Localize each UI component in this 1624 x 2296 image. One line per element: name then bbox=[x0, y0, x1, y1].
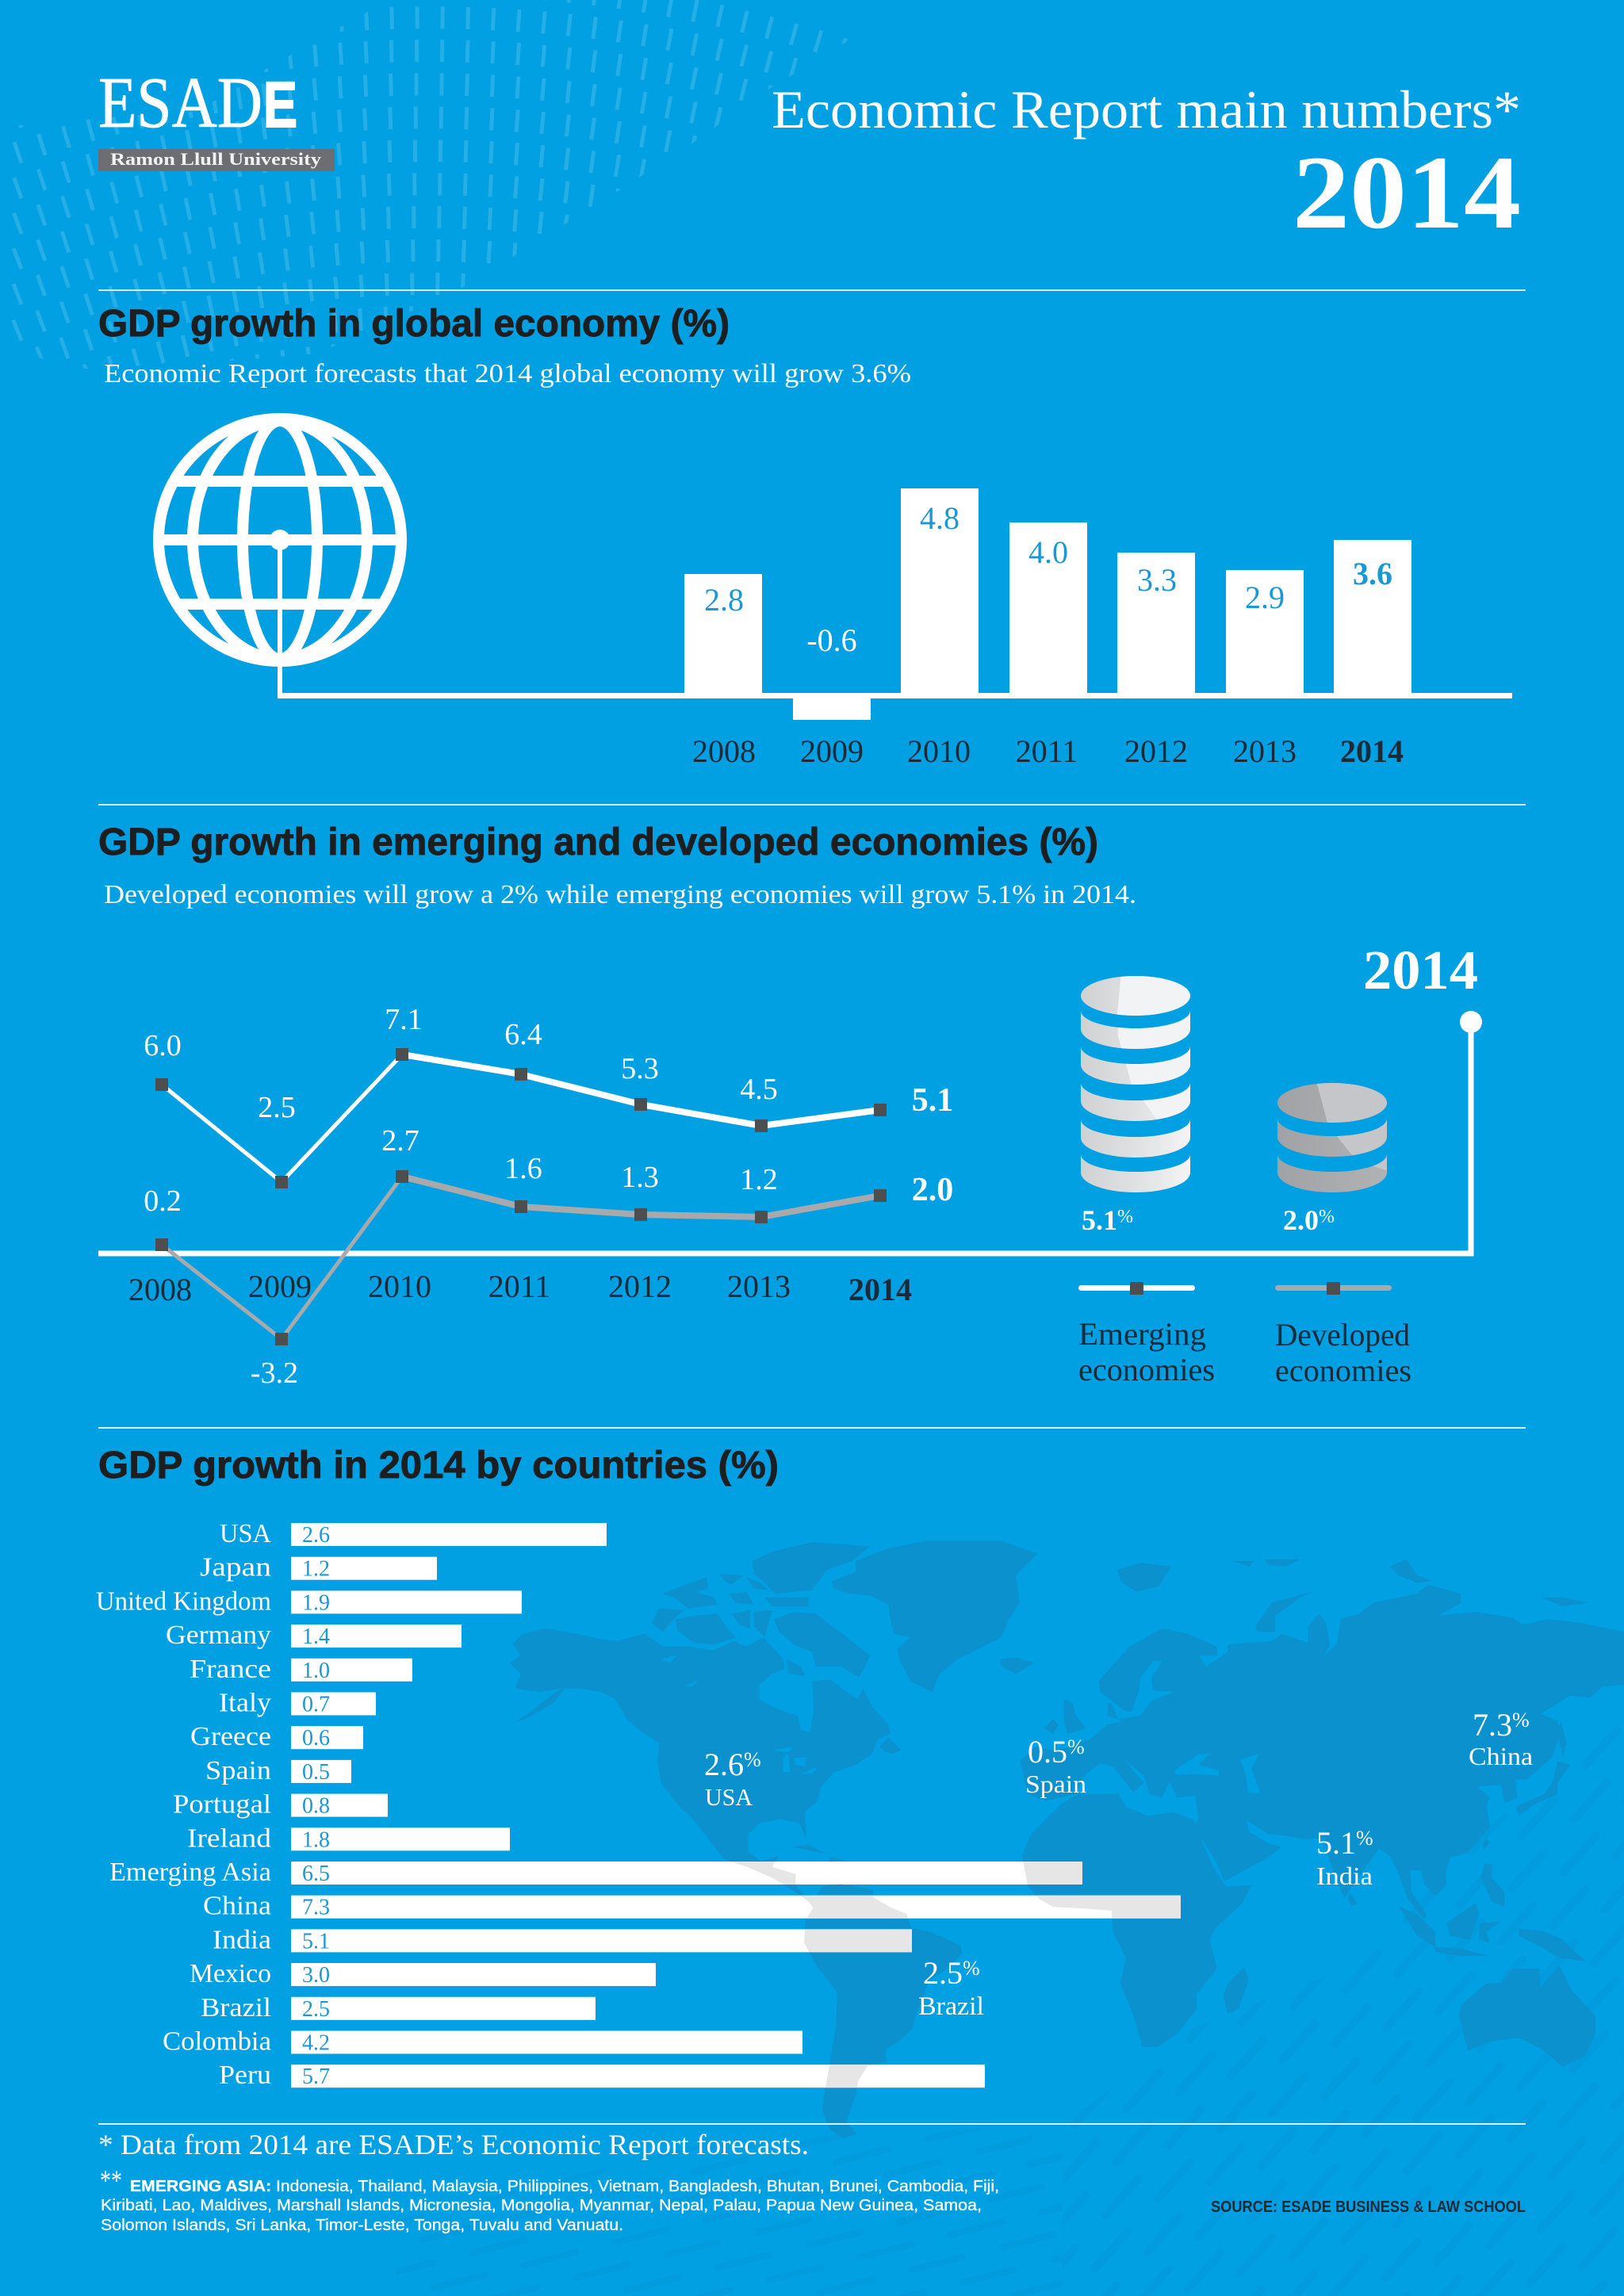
bar 2014: 3.6 bbox=[1353, 556, 1392, 591]
row USA: 2.6 bbox=[302, 1523, 330, 1548]
row Brazil: Brazil bbox=[201, 1993, 271, 2022]
map callout India: % bbox=[1356, 1827, 1373, 1850]
bar 2013: 2.9 bbox=[1245, 580, 1285, 615]
developed value labels: -3.2 bbox=[251, 1357, 298, 1390]
decorative fan of light dashes, top left bbox=[11, 0, 848, 369]
bar 2009: -0.6 bbox=[806, 622, 857, 658]
row Germany: Germany bbox=[166, 1621, 271, 1650]
2014 label: 2014 bbox=[1363, 940, 1478, 1001]
world map bbox=[510, 1541, 1624, 2138]
row Peru: 5.7 bbox=[302, 2064, 330, 2089]
row Emerging Asia: Emerging Asia bbox=[109, 1858, 271, 1887]
row Colombia bbox=[163, 2026, 802, 2057]
map callout Spain: 0.5 bbox=[1028, 1734, 1067, 1770]
emerging asia note: ** bbox=[100, 2164, 122, 2196]
row France: 1.0 bbox=[302, 1659, 330, 1683]
developed stack value: % bbox=[1319, 1207, 1335, 1227]
map callout India: India bbox=[1316, 1862, 1373, 1890]
bar 2013 bbox=[1226, 570, 1304, 769]
map callout China: 7.3 bbox=[1473, 1707, 1512, 1743]
row Japan: Japan bbox=[200, 1553, 271, 1582]
emerging economies series bbox=[155, 1048, 887, 1188]
year axis labels: 2008 bbox=[128, 1272, 192, 1307]
bar 2008: 2.8 bbox=[704, 582, 744, 618]
forecast note: * Data from 2014 are ESADE’s Economic Report forecasts. bbox=[98, 2129, 809, 2160]
map callout Spain: Spain bbox=[1025, 1770, 1086, 1798]
chart baseline bbox=[278, 693, 1512, 698]
row Emerging Asia bbox=[109, 1858, 1082, 1887]
map callout Brazil: 2.5 bbox=[923, 1955, 963, 1991]
emerging value labels: 7.1 bbox=[385, 1003, 423, 1036]
icon: globe bbox=[159, 419, 401, 698]
legend: emerging economies bbox=[1078, 1282, 1215, 1387]
row Ireland: 1.8 bbox=[302, 1827, 330, 1852]
title year: 2014 bbox=[1293, 134, 1521, 251]
emerging value labels bbox=[144, 1003, 953, 1124]
row India: India bbox=[213, 1925, 271, 1954]
bar 2010: 2010 bbox=[907, 733, 971, 769]
university badge bbox=[98, 149, 335, 171]
row Ireland: Ireland bbox=[187, 1823, 271, 1853]
footnotes bbox=[98, 2129, 1526, 2234]
heading: GDP growth in 2014 by countries (%) bbox=[98, 1445, 779, 1487]
intro text: Developed economies will grow a 2% while emerging economies will grow 5.1% in 2014. bbox=[104, 880, 1136, 909]
bar 2011: 4.0 bbox=[1028, 534, 1068, 570]
ESADE logo bbox=[98, 63, 335, 171]
year axis labels: 2010 bbox=[368, 1269, 431, 1304]
developed stack value: 2.0 bbox=[1283, 1204, 1319, 1236]
developed value labels: 1.2 bbox=[740, 1163, 778, 1196]
row Mexico: 3.0 bbox=[302, 1963, 330, 1988]
row Greece: Greece bbox=[190, 1722, 271, 1751]
heading: GDP growth in global economy (%) bbox=[98, 303, 730, 345]
row Mexico: Mexico bbox=[190, 1959, 271, 1988]
heading: GDP growth in emerging and developed economies (%) bbox=[98, 821, 1098, 863]
title bbox=[772, 79, 1521, 251]
legend: developed economies: Developed bbox=[1275, 1317, 1410, 1353]
row Colombia: Colombia bbox=[163, 2026, 271, 2057]
emerging asia note: Solomon Islands, Sri Lanka, Timor-Leste, Tonga, Tuvalu and Vanuatu. bbox=[101, 2217, 623, 2234]
panel: GDP growth in emerging and developed economies bbox=[98, 821, 1482, 1390]
bar 2014: 2014 bbox=[1340, 733, 1404, 769]
line chart bbox=[98, 1003, 1482, 1390]
map callout USA: % bbox=[744, 1748, 761, 1771]
row Spain bbox=[205, 1756, 351, 1785]
map callout USA: 2.6 bbox=[704, 1747, 744, 1782]
year axis labels: 2011 bbox=[488, 1269, 550, 1304]
bar 2010 bbox=[901, 488, 979, 769]
developed economies series bbox=[155, 1170, 887, 1345]
emerging value labels: 5.3 bbox=[621, 1052, 659, 1085]
row Japan: 1.2 bbox=[302, 1557, 330, 1582]
row Peru: Peru bbox=[219, 2061, 271, 2090]
bar 2012: 3.3 bbox=[1137, 562, 1177, 598]
emerging value labels: 6.4 bbox=[504, 1018, 542, 1051]
source: SOURCE: ESADE BUSINESS & LAW SCHOOL bbox=[1211, 2198, 1526, 2216]
intro text: Economic Report forecasts that 2014 global economy will grow 3.6% bbox=[104, 359, 911, 388]
year axis labels: 2009 bbox=[248, 1269, 312, 1304]
panel: GDP growth in 2014 by countries bbox=[96, 1445, 1624, 2138]
row Portugal: Portugal bbox=[173, 1790, 271, 1820]
emerging asia note: Kiribati, Lao, Maldives, Marshall Islands, Micronesia, Mongolia, Myanmar, Nepal, Palau, Papua New Guinea, Samoa, bbox=[101, 2197, 982, 2214]
emerging asia note bbox=[100, 2164, 999, 2234]
year axis labels: 2014 bbox=[848, 1272, 912, 1307]
logo wordmark: ESAD bbox=[98, 63, 262, 143]
emerging value labels: 2.5 bbox=[258, 1091, 296, 1124]
developed value labels: 2.0 bbox=[912, 1172, 953, 1208]
bar 2013: 2013 bbox=[1233, 733, 1297, 769]
row China bbox=[203, 1892, 1181, 1921]
developed value labels: 1.3 bbox=[621, 1161, 659, 1194]
row United Kingdom bbox=[96, 1586, 522, 1616]
map callout Spain bbox=[1025, 1734, 1086, 1798]
map callout Brazil bbox=[918, 1955, 984, 2021]
bar chart bbox=[278, 488, 1512, 769]
map callout USA: USA bbox=[705, 1783, 753, 1811]
row Spain: 0.5 bbox=[302, 1760, 330, 1785]
decorative dark dashes, bottom bbox=[396, 1705, 1624, 2296]
map callout India: 5.1 bbox=[1316, 1825, 1356, 1861]
axis with end marker bbox=[98, 1011, 1482, 1253]
row Ireland bbox=[187, 1823, 510, 1853]
legend: emerging economies: economies bbox=[1078, 1352, 1215, 1387]
emerging value labels: 5.1 bbox=[912, 1082, 953, 1119]
row Brazil: 2.5 bbox=[302, 1997, 330, 2022]
legend: developed economies bbox=[1275, 1282, 1411, 1388]
map callout Brazil: % bbox=[963, 1957, 980, 1980]
row Portugal bbox=[173, 1790, 388, 1820]
row Greece: 0.6 bbox=[302, 1726, 330, 1751]
row China: China bbox=[203, 1892, 271, 1921]
row Japan bbox=[200, 1553, 437, 1582]
row Italy bbox=[219, 1689, 376, 1717]
developed value labels: 0.2 bbox=[144, 1184, 182, 1218]
row Italy: Italy bbox=[219, 1689, 271, 1717]
legend: emerging economies: Emerging bbox=[1078, 1316, 1206, 1352]
map callout China: % bbox=[1512, 1709, 1530, 1732]
bar 2012 bbox=[1117, 553, 1195, 769]
row Brazil bbox=[201, 1993, 596, 2022]
title line: Economic Report main numbers* bbox=[772, 79, 1521, 140]
row Emerging Asia: 6.5 bbox=[302, 1862, 330, 1886]
row France bbox=[190, 1655, 412, 1684]
emerging value labels: 4.5 bbox=[740, 1073, 778, 1106]
horizontal bars bbox=[96, 1519, 1181, 2090]
row China: 7.3 bbox=[302, 1896, 330, 1920]
year axis labels: 2012 bbox=[608, 1269, 672, 1304]
developed value labels bbox=[144, 1124, 953, 1390]
inland seas and lakes on the map bbox=[661, 1655, 1261, 1794]
row Germany: 1.4 bbox=[302, 1624, 330, 1649]
row Spain: Spain bbox=[205, 1756, 271, 1785]
developed value labels: 1.6 bbox=[504, 1152, 542, 1185]
map callout China bbox=[1469, 1707, 1533, 1770]
row United Kingdom: 1.9 bbox=[302, 1590, 330, 1615]
bar 2009 bbox=[793, 622, 871, 769]
emerging asia note: EMERGING ASIA: Indonesia, Thailand, Malaysia, Philippines, Vietnam, Bangladesh, Bhutan, Brunei, Cambodia, Fiji, bbox=[130, 2178, 999, 2195]
map callout USA bbox=[704, 1747, 761, 1811]
logo wordmark: E bbox=[263, 69, 297, 141]
bar 2008 bbox=[684, 574, 762, 769]
row Peru bbox=[219, 2061, 985, 2090]
row USA: USA bbox=[220, 1519, 271, 1548]
row Germany bbox=[166, 1621, 462, 1650]
map callout Brazil: Brazil bbox=[918, 1992, 984, 2021]
icon: developed coin stack bbox=[1277, 1083, 1387, 1192]
emerging stack value: 5.1 bbox=[1082, 1204, 1117, 1236]
row India: 5.1 bbox=[302, 1929, 330, 1954]
map callout China: China bbox=[1469, 1742, 1533, 1770]
map callout Spain: % bbox=[1067, 1735, 1085, 1758]
row France: France bbox=[190, 1655, 271, 1684]
row Portugal: 0.8 bbox=[302, 1794, 330, 1819]
bar 2014 bbox=[1334, 540, 1411, 769]
row USA bbox=[220, 1519, 607, 1548]
row Greece bbox=[190, 1722, 363, 1751]
emerging value labels: 6.0 bbox=[144, 1029, 182, 1062]
bar 2011 bbox=[1009, 522, 1087, 769]
row Colombia: 4.2 bbox=[302, 2031, 330, 2055]
map seen through the bars bbox=[731, 1862, 1181, 2088]
bar 2008: 2008 bbox=[692, 733, 756, 769]
map callout India bbox=[1316, 1825, 1373, 1890]
bar 2012: 2012 bbox=[1124, 733, 1188, 769]
bar 2010: 4.8 bbox=[920, 500, 959, 536]
bar 2009: 2009 bbox=[800, 733, 864, 769]
university badge: Ramon Llull University bbox=[110, 149, 321, 169]
row Mexico bbox=[190, 1959, 656, 1988]
row United Kingdom: United Kingdom bbox=[96, 1586, 271, 1616]
bar 2011: 2011 bbox=[1016, 733, 1078, 769]
panel: GDP growth in global economy bbox=[98, 303, 1512, 769]
emerging stack value: % bbox=[1117, 1207, 1133, 1227]
year axis labels: 2013 bbox=[727, 1269, 791, 1304]
year axis labels bbox=[128, 1269, 912, 1307]
icon: emerging coin stack bbox=[1081, 976, 1190, 1192]
developed value labels: 2.7 bbox=[381, 1124, 419, 1158]
legend: developed economies: economies bbox=[1275, 1353, 1411, 1388]
row India bbox=[213, 1925, 912, 1954]
row Italy: 0.7 bbox=[302, 1692, 330, 1717]
